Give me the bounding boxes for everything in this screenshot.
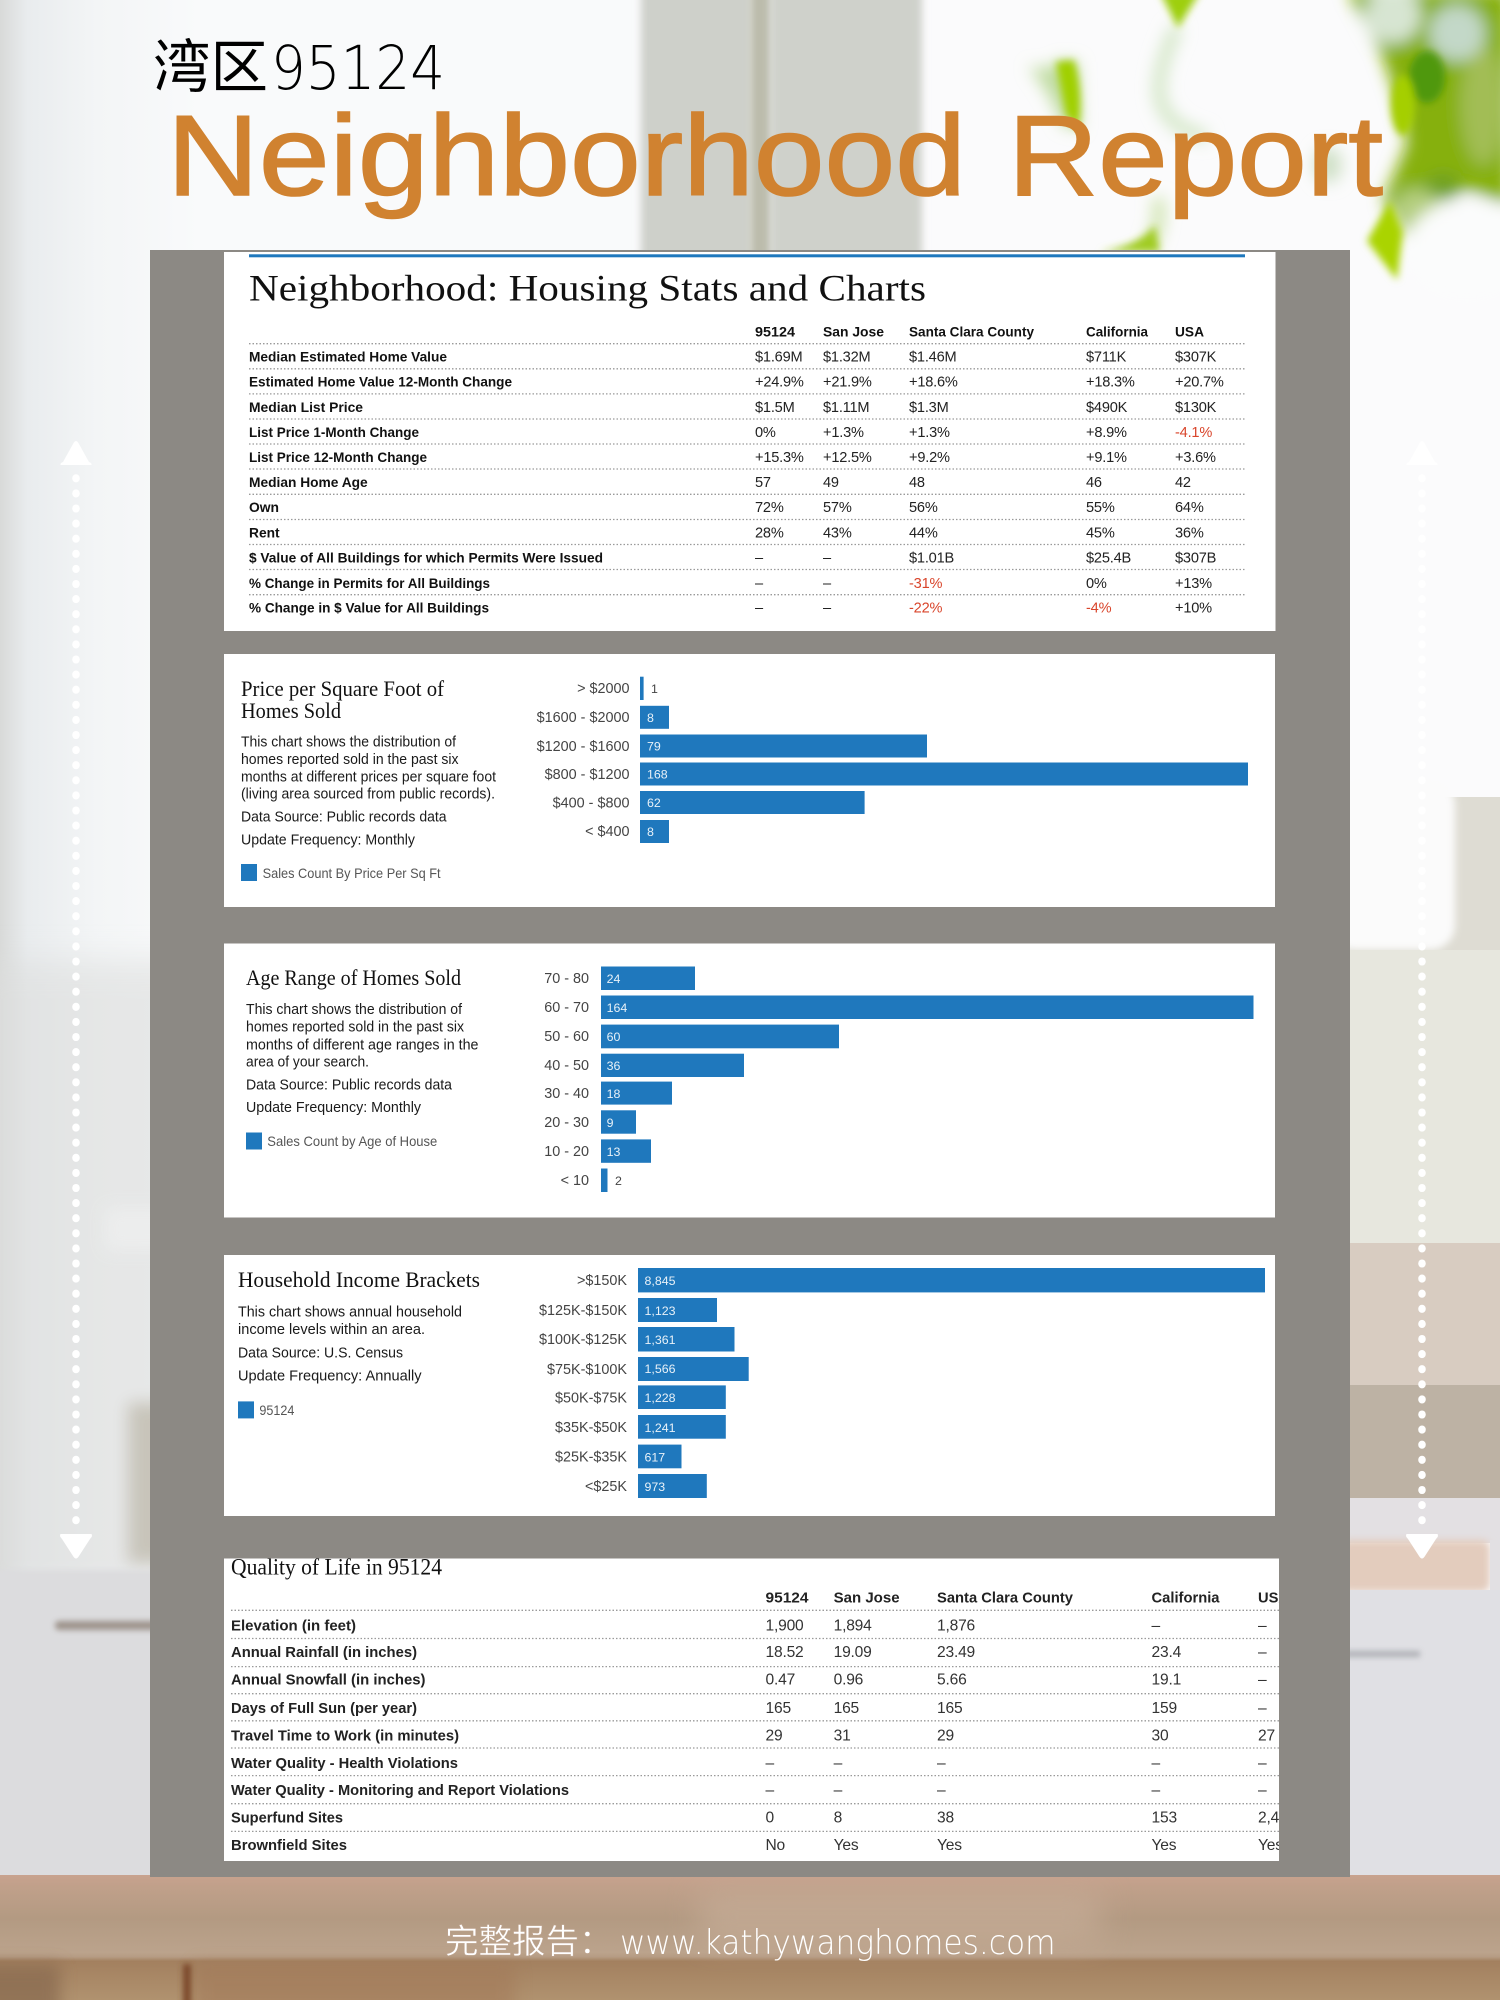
row: change in value: – (823, 601, 832, 617)
row: water quality health violations: – (834, 1755, 843, 1772)
row: superfund sites: 38 (937, 1809, 954, 1826)
row: rent: 45% (1086, 526, 1115, 542)
table header row: USA (1175, 324, 1204, 340)
row: superfund sites: 153 (1152, 1809, 1177, 1826)
bar: $35K-$50K (555, 1415, 726, 1439)
bar: under $400: 8 (647, 825, 654, 839)
row: days of full sun (232, 1702, 1267, 1716)
table header row: USA (1258, 1591, 1289, 1607)
bar: $50K-$75K: $50K-$75K (555, 1390, 627, 1406)
bar: $75K-$100K (547, 1357, 749, 1381)
row: list price 12-month change (249, 450, 1216, 466)
row: own: 72% (755, 500, 784, 516)
bar: under $25K: 973 (644, 1480, 665, 1494)
row: home value 12-month change: +21.9% (823, 374, 872, 390)
description text: homes reported sold in the past six (246, 1018, 464, 1036)
bar: over $150K (577, 1268, 1265, 1292)
panel: age range of homes sold (224, 944, 1275, 1218)
bar: $1200-$1600 (537, 734, 927, 758)
row: median estimated home value: $1.32M (823, 350, 870, 366)
title: area name: 湾区 (153, 36, 268, 100)
bar: $1600-$2000: 8 (647, 711, 654, 725)
row: median list price: $1.3M (909, 400, 949, 416)
table header row: California (1152, 1591, 1220, 1607)
bar: $1200-$1600: $1200 - $1600 (537, 739, 630, 755)
legend: 95124 (259, 1402, 295, 1418)
row: elevation: – (1258, 1618, 1267, 1634)
row: annual rainfall: 23.4 (1152, 1644, 1182, 1661)
row: days of full sun: – (1258, 1700, 1267, 1717)
row: list price 12-month change: List Price 12-Month Change (249, 450, 427, 465)
row: rent: Rent (249, 526, 280, 540)
row: list price 12-month change: +9.1% (1086, 450, 1127, 466)
row: own: 56% (909, 500, 938, 516)
bar: $50K-$75K (555, 1385, 726, 1409)
legend: Sales Count By Price Per Sq Ft (263, 865, 441, 881)
table header row (755, 324, 1204, 340)
row: water quality health violations: – (1258, 1755, 1267, 1772)
title: Neighborhood Report: Neighborhood (167, 93, 966, 220)
title: Neighborhood Report: Report (1008, 93, 1383, 220)
row: list price 1-month change: -4.1% (1175, 425, 1212, 441)
row: home value 12-month change: +18.6% (909, 374, 958, 390)
table header row: California (1086, 324, 1148, 340)
row: annual rainfall: Annual Rainfall (in inches) (231, 1645, 417, 1661)
row: change in permits: +13% (1175, 576, 1212, 592)
row: superfund sites: 2,4 (1258, 1809, 1280, 1826)
description text: Update Frequency: Annually (238, 1368, 422, 1385)
description text (246, 1001, 478, 1116)
row: change in permits: 0% (1086, 576, 1107, 592)
row: brownfield sites: Yes (937, 1837, 962, 1854)
bar: under $25K (585, 1474, 707, 1498)
row: elevation (232, 1620, 1267, 1634)
bar: over $2000: 1 (651, 682, 658, 696)
row: annual snowfall: – (1258, 1672, 1267, 1689)
table header row: San Jose (823, 324, 884, 340)
background: green leaves (1028, 0, 1500, 300)
heading: age range: Age Range of Homes Sold (246, 965, 461, 990)
bar: 30-40: 30 - 40 (544, 1086, 589, 1102)
row: median estimated home value: $1.69M (755, 350, 802, 366)
row: value of building permits: $ Value of All Buildings for which Permits Were Issued (249, 551, 603, 566)
row: annual snowfall: 0.47 (766, 1672, 795, 1689)
row: water quality report violations: – (937, 1782, 946, 1799)
row: superfund sites: 8 (834, 1809, 842, 1826)
row: median list price: Median List Price (249, 400, 363, 415)
row: water quality health violations: – (937, 1755, 946, 1772)
bar: 20-30: 20 - 30 (544, 1115, 589, 1131)
row: travel time to work: 27 (1258, 1727, 1275, 1744)
row: superfund sites: Superfund Sites (231, 1810, 343, 1826)
row: list price 12-month change: +9.2% (909, 450, 950, 466)
row: median home age: 48 (909, 475, 925, 491)
row: change in permits: -31% (909, 576, 942, 592)
bar: $75K-$100K: $75K-$100K (547, 1362, 627, 1378)
bar: $125K-$150K: $125K-$150K (539, 1303, 627, 1319)
heading: price per square foot: Price per Square Foot of (241, 676, 445, 701)
bar: $1600-$2000 (537, 706, 669, 729)
bar: under 10 (561, 1168, 622, 1192)
footer: full report link: 完整报告： (445, 1924, 612, 1961)
heading: price per square foot (241, 676, 445, 723)
bar: 60-70: 164 (607, 1001, 627, 1015)
table header row: Santa Clara County (937, 1591, 1074, 1607)
row: rent (249, 526, 1204, 542)
row: change in value: % Change in $ Value for All Buildings (249, 601, 489, 616)
row: days of full sun: 165 (834, 1700, 860, 1717)
heading: housing stats: Neighborhood: Housing Stats and Charts (249, 268, 926, 310)
row: value of building permits: $25.4B (1086, 551, 1131, 567)
title: area name: 95124 (271, 33, 445, 104)
row: list price 1-month change: +1.3% (823, 425, 864, 441)
row: brownfield sites: No (766, 1837, 786, 1854)
row: home value 12-month change: +24.9% (755, 374, 804, 390)
row: water quality health violations: – (766, 1755, 774, 1772)
row: days of full sun: Days of Full Sun (per year) (231, 1701, 417, 1717)
row: home value 12-month change: Estimated Home Value 12-Month Change (249, 374, 512, 390)
row: elevation: 1,900 (766, 1618, 804, 1634)
row: value of building permits: – (823, 551, 832, 567)
bar: 40-50 (544, 1054, 744, 1077)
bar: 10-20 (544, 1139, 651, 1163)
row: list price 12-month change: +3.6% (1175, 450, 1216, 466)
row: home value 12-month change: +20.7% (1175, 374, 1224, 390)
bar: 70-80 (544, 966, 695, 990)
description text: This chart shows the distribution of (246, 1001, 463, 1018)
row: value of building permits: $307B (1175, 551, 1216, 567)
bar: under $400: < $400 (585, 824, 630, 840)
title: Neighborhood Report (167, 93, 1383, 220)
row: brownfield sites: Brownfield Sites (231, 1838, 347, 1854)
row: median home age: Median Home Age (249, 475, 368, 490)
row: days of full sun: 165 (937, 1700, 963, 1717)
bar: under $400 (585, 820, 669, 843)
row: annual snowfall: 19.1 (1152, 1672, 1181, 1689)
panel: household income brackets (224, 1255, 1275, 1516)
row: median list price: $130K (1175, 400, 1217, 416)
description text (241, 734, 497, 848)
row: list price 1-month change: +1.3% (909, 425, 950, 441)
row: median home age: 46 (1086, 475, 1102, 491)
row: change in value: -22% (909, 601, 942, 617)
row: median home age: 49 (823, 475, 839, 491)
legend: Sales Count by Age of House (267, 1133, 437, 1149)
row: annual rainfall: 23.49 (937, 1644, 975, 1661)
row: own: 64% (1175, 500, 1204, 516)
bar: $125K-$150K (539, 1298, 717, 1322)
bar: 30-40: 18 (607, 1087, 620, 1101)
bar: 20-30: 9 (607, 1116, 614, 1130)
description text (238, 1304, 462, 1385)
row: annual snowfall: 5.66 (937, 1672, 967, 1689)
bar: $800-$1200: $800 - $1200 (545, 767, 630, 783)
bar: 10-20: 10 - 20 (544, 1144, 589, 1160)
bar: over $2000: > $2000 (577, 681, 630, 697)
description text: months of different age ranges in the (246, 1036, 478, 1054)
description text: (living area sourced from public records). (241, 786, 495, 802)
row: annual snowfall: Annual Snowfall (in inches) (231, 1673, 426, 1689)
description text: months at different prices per square foot (241, 768, 497, 786)
description text: homes reported sold in the past six (241, 751, 459, 768)
row: water quality health violations (231, 1757, 1267, 1771)
row: travel time to work: 29 (937, 1727, 954, 1744)
bar: $400-$800: $400 - $800 (553, 796, 630, 812)
row: annual rainfall (231, 1646, 1267, 1660)
description text: income levels within an area. (238, 1321, 425, 1338)
heading: quality of life: Quality of Life in 95124 (231, 1554, 442, 1580)
row: superfund sites (232, 1812, 1279, 1826)
table header row: Santa Clara County (909, 324, 1034, 340)
bar: 40-50: 36 (607, 1059, 620, 1073)
row: annual snowfall (231, 1674, 1267, 1688)
row: water quality report violations: Water Quality - Monitoring and Report Violations (231, 1783, 569, 1799)
row: water quality health violations: – (1152, 1755, 1160, 1772)
bar: over $150K: >$150K (577, 1273, 627, 1289)
row: list price 1-month change: 0% (755, 425, 776, 441)
background: wooden table edge (0, 1875, 1500, 2000)
description text: Data Source: Public records data (246, 1077, 453, 1094)
row: home value 12-month change (249, 374, 1224, 390)
table header row: 95124 (755, 324, 795, 340)
row: water quality report violations: – (834, 1782, 843, 1799)
row: median list price: $1.11M (823, 400, 869, 416)
bar: $25K-$35K: 617 (644, 1450, 665, 1464)
row: change in permits (249, 576, 1212, 592)
bar: over $2000 (577, 677, 658, 700)
row: value of building permits: – (755, 551, 764, 567)
table header row (766, 1592, 1279, 1606)
row: elevation: Elevation (in feet) (231, 1618, 356, 1634)
bar: 60-70 (544, 996, 1254, 1019)
description text: area of your search. (246, 1054, 369, 1070)
row: travel time to work: 31 (834, 1727, 851, 1744)
bar chart: income brackets (539, 1268, 1265, 1498)
row: water quality report violations: – (1258, 1782, 1267, 1799)
row: median list price: $1.5M (755, 400, 795, 416)
bar: $100K-$125K: $100K-$125K (539, 1332, 627, 1348)
row: days of full sun: 165 (766, 1700, 791, 1717)
row: travel time to work: 29 (766, 1727, 782, 1744)
bar: $100K-$125K: 1,361 (644, 1333, 676, 1347)
title: area name (153, 33, 445, 104)
row: superfund sites: 0 (766, 1809, 774, 1826)
bar: 70-80: 70 - 80 (544, 971, 589, 987)
panel: housing stats table (224, 252, 1276, 631)
row: median estimated home value: $711K (1086, 350, 1127, 366)
description text: This chart shows annual household (238, 1304, 462, 1321)
row: annual rainfall: – (1258, 1644, 1267, 1661)
row: travel time to work: Travel Time to Work (in minutes) (231, 1728, 459, 1744)
row: change in permits: – (823, 576, 832, 592)
bar: $25K-$35K (555, 1445, 682, 1468)
bar: 30-40 (544, 1082, 672, 1105)
row: own: Own (249, 500, 279, 515)
row: median estimated home value: $307K (1175, 350, 1217, 366)
row: rent: 44% (909, 526, 938, 542)
row: change in value: -4% (1086, 601, 1112, 617)
bar: $100K-$125K (539, 1327, 734, 1352)
bar: $800-$1200 (545, 762, 1248, 786)
bar: $35K-$50K: $35K-$50K (555, 1420, 627, 1436)
bar: 50-60: 60 (607, 1030, 620, 1044)
row: value of building permits (249, 551, 1216, 567)
bar: 40-50: 40 - 50 (544, 1058, 589, 1074)
row: elevation: – (1152, 1618, 1160, 1634)
row: elevation: 1,876 (937, 1618, 975, 1634)
footer: full report link (445, 1923, 1056, 1963)
table header row: San Jose (834, 1591, 900, 1607)
bar: under 10: 2 (615, 1174, 622, 1188)
description text: Update Frequency: Monthly (246, 1099, 421, 1116)
row: change in value: – (755, 601, 764, 617)
panel: price per square foot (224, 654, 1275, 907)
bar: under $25K: <$25K (585, 1479, 627, 1495)
bar: $800-$1200: 168 (647, 768, 668, 782)
bar: $400-$800 (553, 791, 865, 814)
bar: 10-20: 13 (607, 1145, 620, 1159)
row: change in value (249, 601, 1212, 617)
table header row: 95124 (766, 1591, 809, 1607)
row: brownfield sites: Yes (834, 1837, 859, 1854)
row: water quality report violations: – (1152, 1782, 1160, 1799)
row: median home age (249, 475, 1191, 491)
bar: $50K-$75K: 1,228 (644, 1391, 676, 1405)
row: water quality health violations: Water Quality - Health Violations (231, 1756, 458, 1772)
bar: $75K-$100K: 1,566 (644, 1362, 676, 1376)
row: elevation: 1,894 (834, 1618, 872, 1634)
row: home value 12-month change: +18.3% (1086, 374, 1135, 390)
footer: full report link: www.kathywanghomes.com (620, 1923, 1056, 1963)
panel: quality of life table (224, 1554, 1289, 1861)
description text: Update Frequency: Monthly (241, 832, 415, 848)
row: change in permits: – (755, 576, 764, 592)
row: value of building permits: $1.01B (909, 551, 954, 567)
gray backing panel (150, 250, 1350, 1877)
row: days of full sun: 159 (1152, 1700, 1177, 1717)
description text: Data Source: Public records data (241, 808, 447, 826)
row: brownfield sites (232, 1839, 1279, 1850)
row: annual rainfall: 18.52 (766, 1644, 804, 1661)
bar: $25K-$35K: $25K-$35K (555, 1450, 627, 1466)
row: travel time to work (231, 1730, 1274, 1744)
heading: household income: Household Income Brackets (238, 1267, 480, 1292)
bar: 50-60 (544, 1025, 839, 1048)
row: own (249, 500, 1204, 516)
bar chart: price per square foot (537, 677, 1248, 843)
row: brownfield sites: Yes (1258, 1837, 1283, 1854)
bar: $1200-$1600: 79 (647, 740, 661, 754)
description text: This chart shows the distribution of (241, 734, 457, 750)
row: median list price: $490K (1086, 400, 1128, 416)
legend (238, 1401, 295, 1418)
row: list price 1-month change: +8.9% (1086, 425, 1127, 441)
row: median list price (249, 400, 1217, 416)
row: median estimated home value: Median Estimated Home Value (249, 350, 447, 364)
bar: over $150K: 8,845 (644, 1274, 676, 1288)
description text: Data Source: U.S. Census (238, 1344, 403, 1362)
row: median estimated home value (249, 350, 1217, 366)
row: median home age: 42 (1175, 475, 1191, 491)
bar: $1600-$2000: $1600 - $2000 (537, 710, 630, 726)
row: list price 12-month change: +15.3% (755, 450, 804, 466)
row: change in value: +10% (1175, 601, 1212, 617)
row: brownfield sites: Yes (1152, 1837, 1177, 1854)
row: rent: 28% (755, 526, 784, 542)
row: own: 55% (1086, 500, 1115, 516)
bar: 60-70: 60 - 70 (544, 1000, 589, 1016)
row: own: 57% (823, 500, 852, 516)
row: rent: 43% (823, 526, 852, 542)
bar chart: age of homes (544, 966, 1254, 1192)
bar: under 10: < 10 (561, 1173, 589, 1189)
row: rent: 36% (1175, 526, 1204, 542)
row: annual snowfall: 0.96 (834, 1672, 863, 1689)
row: list price 1-month change (249, 425, 1212, 441)
row: travel time to work: 30 (1152, 1727, 1169, 1744)
heading: price per square foot: Homes Sold (241, 698, 341, 723)
bar: $35K-$50K: 1,241 (644, 1421, 676, 1435)
bar: $125K-$150K: 1,123 (644, 1304, 676, 1318)
bar: 20-30 (544, 1110, 636, 1134)
row: median estimated home value: $1.46M (909, 350, 956, 366)
row: annual rainfall: 19.09 (834, 1644, 872, 1661)
row: change in permits: % Change in Permits for All Buildings (249, 576, 490, 591)
arrow: right dotted double-headed (1406, 441, 1438, 1558)
row: list price 1-month change: List Price 1-Month Change (249, 425, 419, 440)
row: water quality report violations: – (766, 1782, 774, 1799)
row: list price 12-month change: +12.5% (823, 450, 872, 466)
bar: 70-80: 24 (607, 972, 620, 986)
bar: 50-60: 50 - 60 (544, 1029, 589, 1045)
bar: $400-$800: 62 (647, 796, 661, 810)
arrow: left dotted double-headed (60, 441, 92, 1558)
row: median home age: 57 (755, 475, 771, 491)
row: water quality report violations (231, 1784, 1267, 1798)
